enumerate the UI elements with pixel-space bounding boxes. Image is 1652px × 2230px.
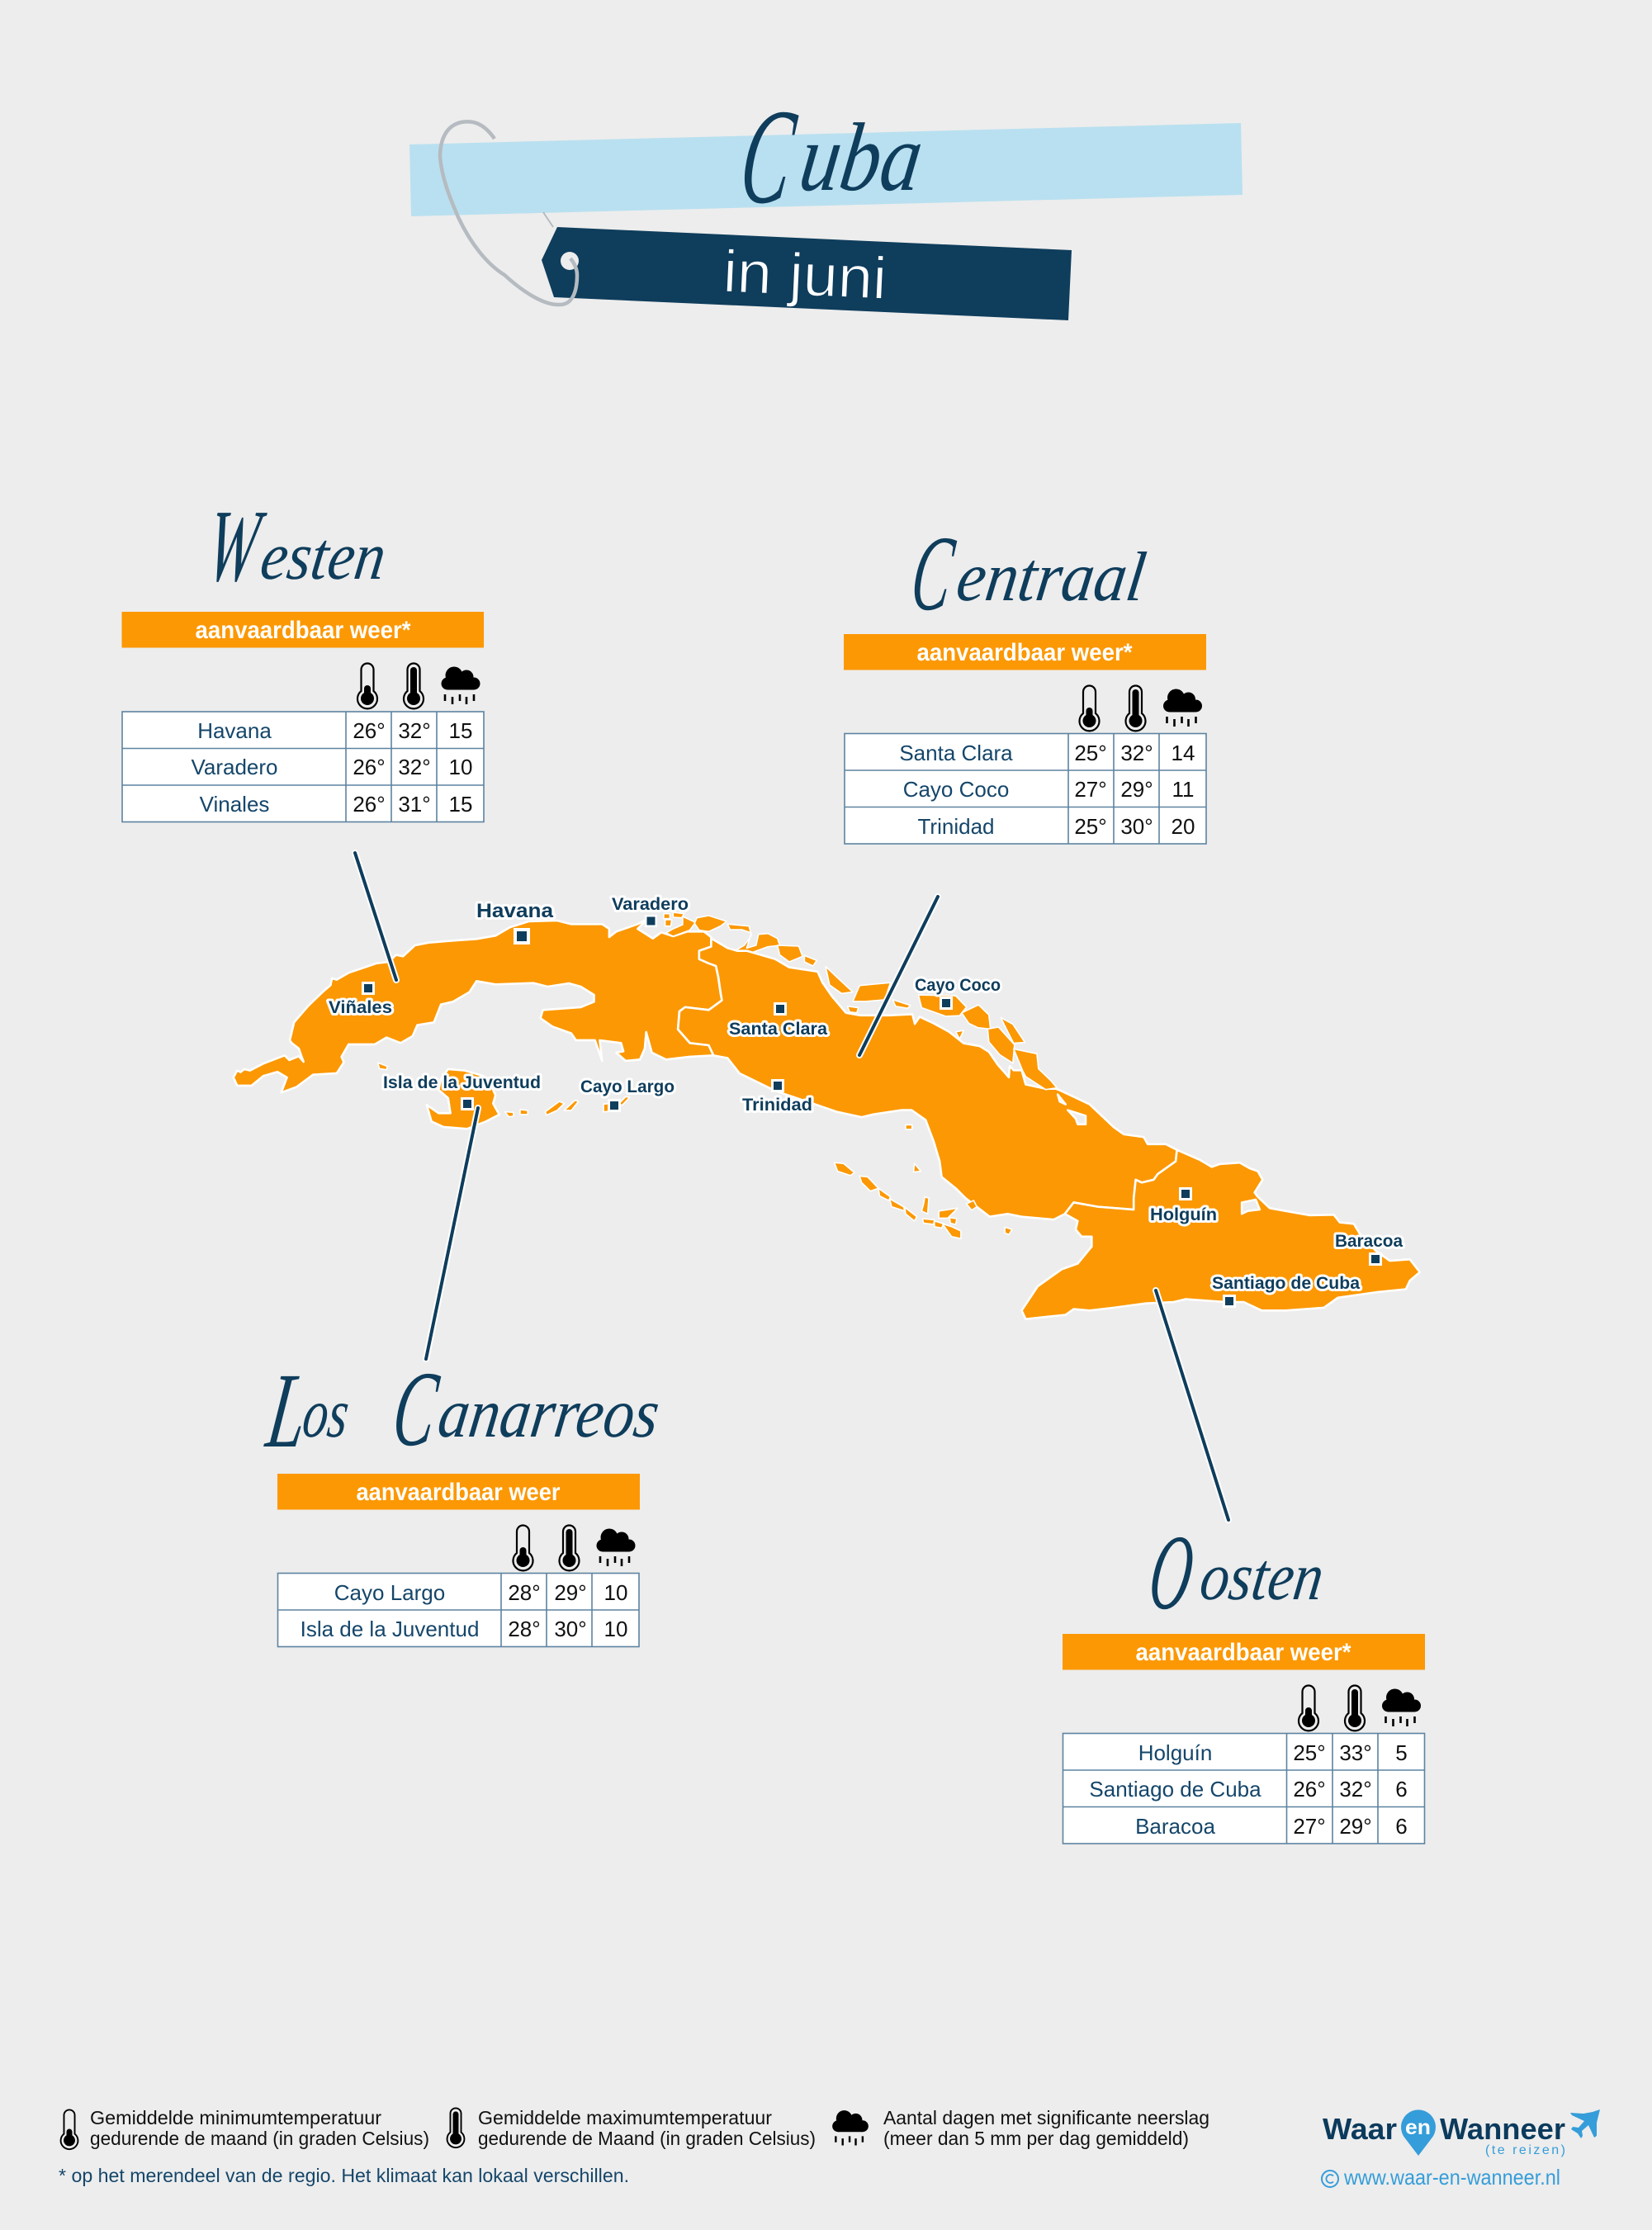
table: 25° [1074, 814, 1107, 839]
icon: minimum temperature [61, 2109, 78, 2149]
table: 6 [1395, 1814, 1408, 1839]
logo tagline: (te reizen) [1485, 2143, 1565, 2157]
table: 32° [398, 755, 431, 779]
table [1063, 1734, 1425, 1844]
table: 11 [1172, 777, 1194, 802]
table: Havana [197, 718, 272, 743]
title: Cuba: uba [793, 103, 930, 211]
Jardines de la Reina islets [835, 1124, 1012, 1238]
table: 6 [1395, 1777, 1408, 1802]
legend text: rain days: (meer dan 5 mm per dag gemiddeld) [883, 2128, 1189, 2149]
table: 29° [1120, 777, 1153, 802]
table: 30° [554, 1617, 587, 1641]
table: 10 [449, 755, 472, 779]
city marker: Varadero [645, 915, 657, 927]
table: 32° [1120, 741, 1153, 765]
connector: Westen [355, 853, 396, 980]
status bar [844, 634, 1206, 670]
table: 5 [1395, 1740, 1408, 1765]
inlets north coast [1058, 1095, 1086, 1124]
table [122, 712, 484, 822]
table: 29° [1339, 1814, 1372, 1839]
legend text: maximum temperature: gedurende de Maand (in graden Celsius) [478, 2128, 816, 2149]
map of Cuba [234, 912, 1420, 1319]
logo word: en: en [1405, 2116, 1431, 2139]
table: 25° [1293, 1740, 1326, 1765]
heading: Westen: esten [256, 518, 391, 594]
logo: Waar en Wanneer [1322, 2109, 1600, 2190]
status bar: aanvaardbaar weer* [1136, 1639, 1351, 1666]
city label: Santiago de Cuba: Santiago de Cuba [1212, 1274, 1360, 1293]
table: Holguín [1138, 1740, 1212, 1765]
column icons [1299, 1686, 1421, 1730]
city marker: Trinidad [771, 1079, 784, 1092]
table: 10 [604, 1617, 627, 1641]
navy luggage tag [542, 227, 1072, 320]
city marker: Isla de la Juventud [461, 1097, 474, 1110]
panel: Los Canarreos [260, 1351, 664, 1646]
tag hole [561, 252, 579, 270]
region: Los Canarreos, Isla de la Juventud [427, 1069, 499, 1129]
city marker: Cayo Coco [940, 997, 953, 1010]
city marker: Havana [514, 928, 530, 945]
heading: Centraal: entraal [952, 538, 1150, 616]
region: Centraal [678, 939, 1177, 1219]
city label: Trinidad: Trinidad [742, 1096, 812, 1115]
city marker: Viñales [362, 982, 375, 995]
logo word: Waar: Waar [1323, 2112, 1397, 2146]
table: 26° [353, 718, 386, 743]
table: 27° [1074, 777, 1107, 802]
table: 26° [353, 792, 386, 817]
region outlines west part [234, 912, 817, 1129]
city marker: Baracoa [1369, 1252, 1382, 1266]
heading: Oosten: O [1143, 1514, 1200, 1632]
heading: Westen [201, 490, 391, 604]
city label: Santa Clara: Santa Clara [729, 1020, 827, 1039]
status bar [1063, 1634, 1425, 1669]
connector: Oosten [1156, 1290, 1228, 1520]
footnote: * op het merendeel van de regio. Het klimaat kan lokaal verschillen. [59, 2165, 629, 2186]
legend text: rain days: Aantal dagen met significante neerslag [883, 2107, 1209, 2128]
table: 26° [353, 755, 386, 779]
status bar: aanvaardbaar weer [357, 1479, 561, 1506]
heading: Westen: W [201, 490, 271, 604]
connector: Centraal [859, 897, 938, 1055]
panel: Oosten [1063, 1514, 1425, 1844]
title: Cuba [732, 81, 930, 232]
column icons [1080, 685, 1202, 731]
heading: Centraal: C [905, 515, 961, 633]
table: 32° [1339, 1777, 1372, 1802]
city marker: Holguín [1179, 1187, 1192, 1200]
city marker: Santiago de Cuba [1223, 1295, 1236, 1308]
city label: Varadero: Varadero [612, 895, 689, 914]
light blue ribbon [409, 123, 1243, 216]
keys north coast [826, 967, 1057, 1090]
table: Cayo Largo [334, 1580, 445, 1605]
legend [59, 2107, 1209, 2186]
table: 30° [1120, 814, 1153, 839]
table: 31° [398, 792, 431, 817]
legend text: rain days [883, 2107, 1209, 2149]
table: Santiago de Cuba [1089, 1777, 1261, 1802]
region: Westen [234, 919, 722, 1092]
icon: copyright [1322, 2171, 1338, 2187]
table: 10 [604, 1580, 627, 1605]
city marker: Cayo Largo [608, 1099, 621, 1112]
heading: Los Canarreos: anarreos [433, 1375, 664, 1452]
status bar [277, 1474, 640, 1509]
title: Cuba: C [732, 81, 804, 232]
table: 14 [1172, 741, 1195, 765]
icon: maximum temperature [447, 2108, 464, 2147]
region: Oosten [1022, 1150, 1420, 1319]
table: 32° [398, 718, 431, 743]
city label: Baracoa: Baracoa [1335, 1232, 1403, 1251]
status bar [122, 612, 484, 647]
table [277, 1574, 639, 1646]
city label: Havana: Havana [476, 900, 554, 922]
panel: Westen [122, 490, 484, 822]
legend text: maximum temperature: Gemiddelde maximumtemperatuur [478, 2107, 772, 2128]
heading: Los Canarreos: L [260, 1352, 315, 1470]
subtitle: in juni: in juni [722, 239, 888, 312]
city label: Viñales: Viñales [329, 998, 392, 1017]
table: 15 [449, 792, 472, 817]
city label: Holguín: Holguín [1150, 1205, 1217, 1224]
table: Santa Clara [899, 741, 1013, 765]
legend text: minimum temperature: Gemiddelde minimumtemperatuur [90, 2107, 381, 2128]
islets: Los Canarreos [378, 1063, 630, 1117]
table: 26° [1293, 1777, 1326, 1802]
website url: www.waar-en-wanneer.nl [1343, 2165, 1560, 2190]
table: 33° [1339, 1740, 1372, 1765]
connector: Los Canarreos [426, 1108, 478, 1359]
logo word: Wanneer: Wanneer [1440, 2112, 1565, 2146]
tag string back [543, 212, 553, 227]
panel: Centraal [844, 515, 1206, 844]
heading: Los Canarreos [260, 1351, 664, 1470]
city label: Isla de la Juventud: Isla de la Juventud [383, 1073, 541, 1092]
table: Varadero [191, 755, 278, 779]
heading: Oosten: osten [1195, 1539, 1328, 1614]
table: 28° [508, 1617, 541, 1641]
table: 29° [554, 1580, 587, 1605]
islets: Sabana archipelago west [664, 912, 817, 966]
status bar: aanvaardbaar weer* [916, 639, 1133, 666]
column icons [357, 664, 480, 708]
table: 27° [1293, 1814, 1326, 1839]
Nipe bay inlet [1242, 1200, 1260, 1214]
table: Trinidad [918, 814, 994, 839]
city marker: Santa Clara [774, 1002, 787, 1016]
table [845, 733, 1206, 844]
heading: Centraal [905, 515, 1150, 633]
table: 28° [508, 1580, 541, 1605]
table: 15 [449, 718, 472, 743]
table: 20 [1172, 814, 1195, 839]
table: Cayo Coco [903, 777, 1009, 802]
tag string loop [440, 121, 577, 305]
heading: Oosten [1143, 1514, 1328, 1632]
table: Isla de la Juventud [301, 1617, 479, 1641]
icon: rain [832, 2110, 869, 2145]
table: Baracoa [1135, 1814, 1215, 1839]
city label: Cayo Coco: Cayo Coco [915, 976, 1001, 995]
column icons [514, 1526, 636, 1570]
heading: Los Canarreos: os [298, 1375, 353, 1452]
table: 25° [1074, 741, 1107, 765]
icon: plane [1570, 2109, 1600, 2138]
city label: Cayo Largo: Cayo Largo [580, 1077, 675, 1096]
icon: location pin [1401, 2109, 1436, 2156]
legend text: minimum temperature: gedurende de maand (in graden Celsius) [90, 2128, 429, 2149]
legend text: minimum temperature [90, 2107, 429, 2149]
heading: Los Canarreos: C [386, 1351, 445, 1469]
status bar: aanvaardbaar weer* [195, 617, 411, 644]
title banner [409, 81, 1243, 320]
table: Vinales [200, 792, 269, 817]
legend text: maximum temperature [478, 2107, 816, 2149]
